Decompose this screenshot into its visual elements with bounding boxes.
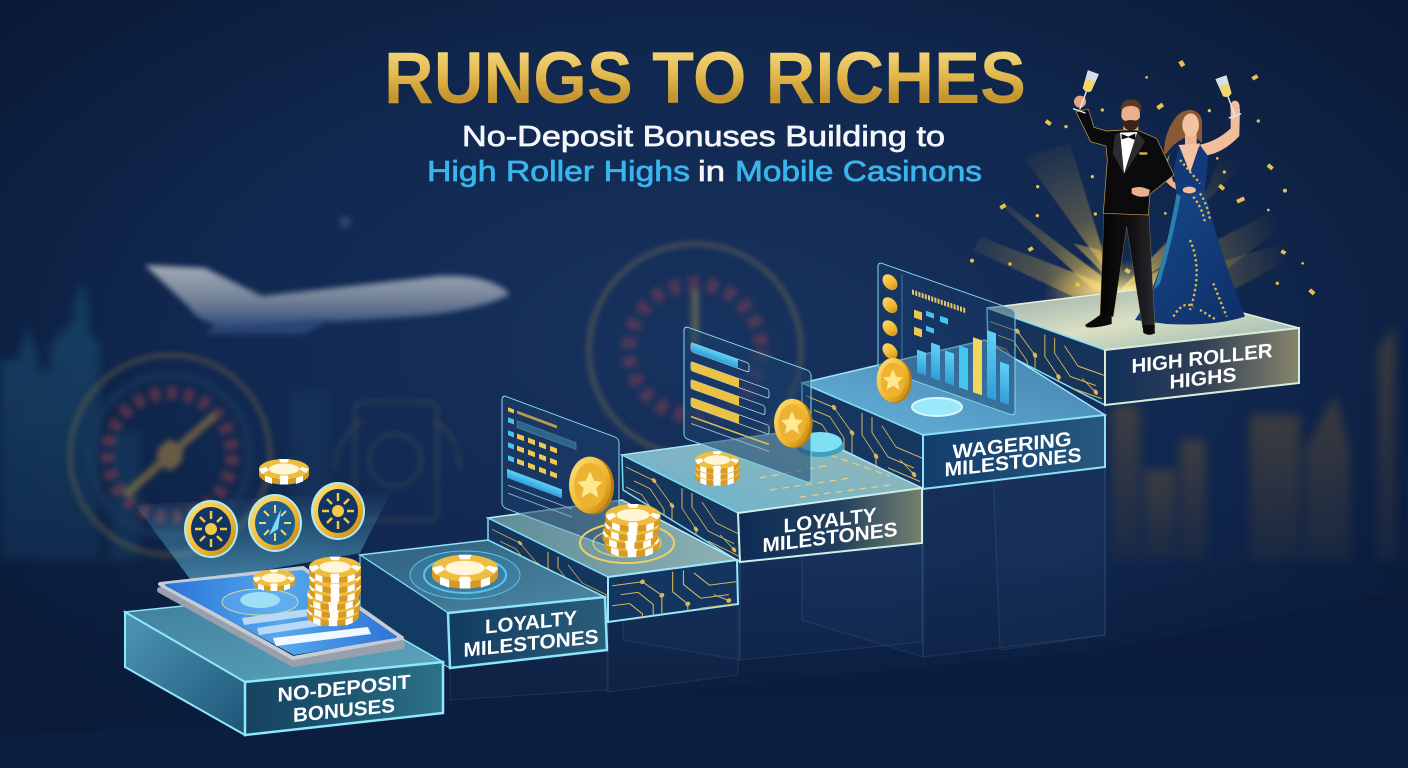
step 1: no-deposit bonuses xyxy=(125,592,443,735)
step label: no-deposit bonuses: BONUSES xyxy=(293,695,395,727)
step label: loyalty milestones: LOYALTY xyxy=(784,504,877,538)
step label: loyalty milestones: LOYALTY xyxy=(485,607,578,639)
glass panel: wagering dashboard xyxy=(878,262,1015,416)
translucent pillars under the steps xyxy=(450,345,1105,700)
blurred roulette wheel centre xyxy=(589,244,801,456)
step label: loyalty milestones: MILESTONES xyxy=(762,519,898,557)
champagne glass right xyxy=(1215,75,1241,118)
chip stack on step 3 xyxy=(580,504,674,563)
step 2: loyalty milestones xyxy=(360,540,607,668)
woman in gown xyxy=(1135,101,1245,325)
subtitle line 2: High Roller Highs xyxy=(427,156,690,188)
man in tuxedo xyxy=(1074,96,1174,335)
coin on step 3 xyxy=(569,457,614,514)
smartphone xyxy=(160,568,402,664)
couple celebrating xyxy=(1073,70,1245,335)
glass panel: loyalty progress bars xyxy=(684,326,811,483)
confetti xyxy=(970,60,1315,295)
step label: loyalty milestones xyxy=(464,607,598,662)
step label: high roller highs: HIGHS xyxy=(1170,364,1236,394)
glass panel: loyalty table xyxy=(502,395,619,551)
hologram chip on step 4 xyxy=(796,432,844,457)
chip on step 2 xyxy=(410,551,520,599)
step 4: loyalty milestones xyxy=(622,430,922,566)
blurred skyline left xyxy=(0,280,330,560)
coin on step 4 xyxy=(774,399,813,448)
floating coin left xyxy=(184,500,238,558)
champagne glass left xyxy=(1073,70,1100,113)
step label: wagering milestones: MILESTONES xyxy=(944,444,1082,482)
subtitle line 2 xyxy=(427,156,982,188)
floor plane xyxy=(0,590,1408,768)
step label: no-deposit bonuses xyxy=(278,671,411,727)
subtitle line 2: Mobile Casinons xyxy=(735,156,982,188)
floating chip xyxy=(259,459,309,484)
blurred skyline right xyxy=(1112,325,1395,560)
blurred private jet xyxy=(145,216,510,334)
halo disc on step 5 xyxy=(912,398,962,416)
step 5: wagering milestones xyxy=(802,340,1105,491)
blurred passport xyxy=(335,402,460,520)
celebration light rays xyxy=(973,140,1320,327)
chip stack on phone xyxy=(307,557,361,626)
chip stack on step 4 xyxy=(695,451,739,486)
floating coin centre xyxy=(248,494,302,552)
floating coin right xyxy=(311,482,365,540)
step label: wagering milestones: WAGERING xyxy=(952,428,1072,464)
coin on step 5 xyxy=(877,358,912,403)
subtitle line 2: in xyxy=(698,156,725,188)
step 6: high roller highs xyxy=(987,288,1299,408)
subtitle line 1: No-Deposit Bonuses Building to xyxy=(462,121,945,153)
hologram beam from phone xyxy=(135,490,392,583)
step label: wagering milestones xyxy=(944,428,1082,482)
step label: high roller highs: HIGH ROLLER xyxy=(1132,340,1273,378)
circuit traces on step 4 top xyxy=(760,455,890,497)
title: RUNGS TO RICHES xyxy=(384,38,1026,119)
step label: high roller highs xyxy=(1132,340,1273,394)
step label: no-deposit bonuses: NO-DEPOSIT xyxy=(278,671,411,707)
step 3: loyalty milestones tier xyxy=(488,500,738,628)
chip on phone xyxy=(253,570,295,591)
blurred roulette wheel left xyxy=(70,355,270,555)
floor xyxy=(0,560,1408,768)
step label: loyalty milestones: MILESTONES xyxy=(464,626,598,662)
step label: loyalty milestones xyxy=(762,504,898,557)
